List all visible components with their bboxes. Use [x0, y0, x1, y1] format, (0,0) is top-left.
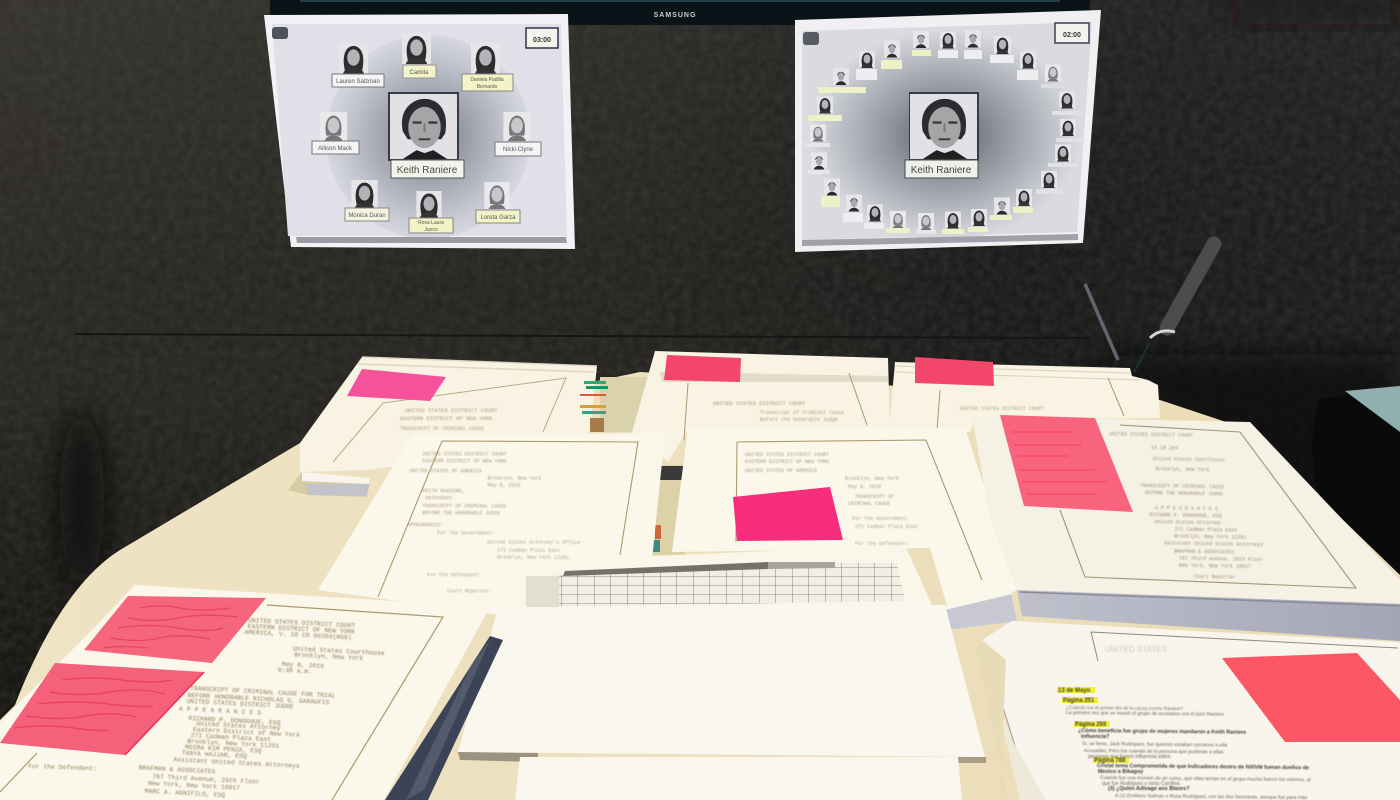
document: bottom-right notes in Spanish: Si, se tiene, Jack Rodríguez, fue quienes estaban cercanos a ella: [1082, 741, 1227, 749]
poster: outer ring diagram: [795, 10, 1101, 252]
document: middle-left transcript: TRANSCRIPT OF CRIMINAL CAUSE: [422, 503, 506, 510]
document: bottom-left transcript: EASTERN DISTRICT OF NEW YORK: [248, 623, 355, 636]
document: middle-left transcript: Court Reporter:: [447, 588, 492, 595]
colored index tabs: [580, 377, 650, 432]
document: bottom-right notes in Spanish: Cristal tema Comprometida de que Indicadores dentro de NXIVM fueran dueños de: [1097, 763, 1309, 771]
stack: top-center document: Transcript of Criminal Cause: [760, 410, 844, 416]
document: middle-center transcript: CRIMINAL CAUSE: [848, 501, 890, 507]
document: bottom-left transcript: MOIRA KIM PENZA, ESQ: [185, 744, 262, 755]
document: bottom-right notes in Spanish: ¿Cuándo fue el primer día de la causa contra Raniere?: [1066, 705, 1183, 712]
document: bottom-right notes in Spanish: Página 255: [1075, 722, 1107, 728]
document: bottom-right notes in Spanish: Acusadas, Pero fue cuando de la persona que pudieran a ellas: [1084, 748, 1224, 755]
portrait: Daniela: Bernardo: [477, 84, 497, 90]
document: middle-left transcript: BEFORE THE HONORABLE JUDGE: [422, 510, 500, 517]
document: right bound transcript: Court Reporter: [1194, 574, 1236, 581]
document: right bound transcript: United States Courthouse: [1153, 456, 1225, 463]
small gray book edge: [944, 590, 1017, 630]
document: middle-left transcript: Brooklyn, New York: [487, 476, 542, 482]
document: bottom-left transcript: UNITED STATES DISTRICT JUDGE: [186, 698, 294, 710]
document: right bound transcript: [972, 415, 1400, 641]
gray book spine: [1017, 590, 1400, 641]
document: right bound transcript: 767 Third Avenue, 26th Floor: [1179, 556, 1263, 563]
wall-mounted Samsung monitor: SAMSUNG: [654, 12, 696, 19]
document: bottom-right notes in Spanish: Página 251: [1063, 698, 1095, 704]
document: bottom-left transcript: Eastern District of New York: [193, 726, 301, 739]
document: bottom-right notes in Spanish: [982, 621, 1400, 800]
document: right bound transcript: TRANSCRIPT OF CRIMINAL CAUSE: [1140, 483, 1224, 490]
document: middle-left transcript: Brooklyn, New York 11201: [497, 555, 569, 561]
document: bottom-left transcript: RICHARD P. DONOGHUE, ESQ: [188, 715, 281, 727]
portrait: Lauren Salzman: Lauren Salzman: [336, 79, 380, 85]
binder: [385, 636, 503, 800]
portrait: Daniela: Daniela Padilla: [470, 77, 504, 83]
document: bottom-left transcript: United States Attorney: [196, 720, 281, 732]
cream round table: [0, 372, 1400, 800]
left page corner on table: [976, 640, 1008, 800]
sticky note: [1000, 415, 1133, 512]
back button: [272, 27, 288, 39]
sticky note: [347, 369, 446, 401]
ring of small portraits: [804, 30, 1082, 234]
document: bottom-right notes in Spanish: Influencia?: [1081, 734, 1109, 740]
clock box: 03:00: [533, 37, 551, 44]
portrait: Loreta Garza: [476, 182, 520, 223]
document: middle-center transcript: Brooklyn, New York: [845, 476, 899, 482]
document: bottom-right notes in Spanish: Mexico a Bikagoy: [1098, 769, 1143, 775]
portrait: Rosa Laura Junco: Junco: [424, 227, 438, 233]
stack: top-center document: UNITED STATES DISTRICT COURT: [713, 400, 806, 407]
document: middle-left transcript: United States Attorney's Office: [487, 540, 580, 546]
document: middle-left transcript: UNITED STATES OF AMERICA: [410, 468, 482, 475]
document: right bound transcript: BRAFMAN & ASSOCIATES: [1174, 549, 1234, 556]
document: bottom-right notes in Spanish: Página 788: [1094, 758, 1126, 764]
document: middle-center transcript: May 8, 2019: [848, 484, 881, 490]
document: bottom-left transcript: Brooklyn, New York: [294, 651, 364, 662]
document: right bound transcript: UNITED STATES DISTRICT COURT: [1109, 431, 1193, 439]
portrait: Monica Duran: [345, 180, 389, 221]
stack: top-left document: EASTERN DISTRICT OF NEW YORK: [400, 415, 493, 422]
document: bottom-left transcript: AMERICA, V. 18 CR 00204(NGG): [244, 629, 352, 641]
document: bottom-left transcript: BEFORE HONORABLE NICHOLAS G. GARAUFIS: [188, 692, 330, 706]
portrait: Nicki Clyne: Nicki Clyne: [503, 147, 534, 153]
sheet with attendance grid: [495, 545, 935, 612]
document: bottom-left transcript: New York, New York 10017: [148, 780, 240, 792]
clock box: 02:00: [1063, 32, 1081, 39]
document: middle-left transcript: APPEARANCES:: [407, 522, 443, 528]
document: bottom-left transcript: Assistant United States Attorneys: [173, 756, 300, 770]
document: middle-center transcript: 271 Cadman Plaza East: [855, 524, 918, 530]
stack: top-left document: [288, 357, 597, 497]
document: right bound transcript: RICHARD P. DONOGHUE, ESQ: [1150, 512, 1222, 519]
document: right bound transcript: United States Attorney: [1155, 519, 1221, 526]
document: middle-left transcript: Defendant.: [425, 495, 455, 501]
document: middle-center transcript: For the Defendant:: [855, 541, 909, 547]
document: middle-left transcript: 271 Cadman Plaza East: [497, 548, 560, 554]
document: right bound transcript: Brooklyn, New York 11201: [1174, 534, 1246, 541]
stack: top-left document: TRANSCRIPT OF CRIMINAL CAUSE: [400, 426, 484, 432]
document: bottom-right notes in Spanish: Cuando fue una reunión de un curso, que ellas tenían en el grupo mucha fueron los mismos, al: [1100, 775, 1311, 783]
portrait: Rosa Laura Junco: [409, 191, 453, 233]
document: middle-left transcript: For the Government:: [437, 530, 494, 537]
back button: [803, 32, 819, 45]
document: middle-center transcript: TRANSCRIPT OF: [855, 494, 894, 500]
document: bottom-right notes in Spanish: ¿Cómo beneficia fue grupo de mujeres mandaron a Keith Raniere: [1078, 728, 1246, 736]
document: bottom-left transcript: TRANSCRIPT OF CRIMINAL CAUSE FOR TRIAL: [190, 685, 336, 700]
portrait: Loreta Garza: Loreta Garza: [480, 215, 516, 221]
document: bottom-right notes in Spanish: personas que fueron influencia sobre.: [1088, 754, 1172, 760]
portrait: Nicki Clyne: [495, 112, 541, 156]
stack: top-center document: [632, 351, 890, 462]
document: bottom-left transcript: Brooklyn, New York 11201: [187, 738, 280, 750]
document: bottom-left transcript: MARC A. AGNIFILO, ESQ: [144, 788, 225, 799]
clock box: [526, 28, 558, 48]
document: bottom-left transcript: For the Defendant:: [28, 763, 97, 772]
stack: top-center document: Before the Honorable Judge: [760, 417, 838, 423]
document: bottom-left transcript: TANYA HAJJAR, ESQ: [182, 750, 247, 760]
document: bottom-right notes in Spanish: La primera vez que se reunió el grupo de acusados con el juez Raniere: [1066, 710, 1224, 718]
document: bottom-left transcript: United States Courthouse: [292, 645, 385, 657]
document: middle-center transcript: For the Government:: [852, 516, 909, 522]
document: bottom-left transcript: 9:30 a.m.: [277, 667, 312, 675]
document: middle-left transcript: UNITED STATES DISTRICT COURT: [423, 451, 507, 458]
document: middle-left transcript: For the Defendant:: [427, 572, 481, 579]
central portrait: Keith Raniere: [905, 92, 979, 178]
portrait: Allison Mack: Allison Mack: [318, 146, 353, 152]
portrait: Camila: [402, 33, 436, 78]
document: right bound transcript: New York, New York 10017: [1179, 563, 1251, 570]
document: middle-center transcript: [672, 428, 1018, 616]
document: middle-left transcript: [318, 433, 665, 615]
sticky note: [1222, 653, 1400, 742]
document: bottom-left transcript: BRAFMAN & ASSOCIATES: [139, 764, 216, 775]
sticky note: lower handwritten: [0, 663, 204, 755]
sticky note: upper handwritten: [84, 596, 266, 663]
document: middle-center transcript: UNITED STATES DISTRICT COURT: [745, 452, 829, 458]
poster: inner circle diagram: [264, 14, 575, 249]
document: middle-left transcript: May 8, 2019: [487, 483, 520, 489]
clock box: [1055, 23, 1089, 43]
document: bottom-left transcript: UNITED STATES DISTRICT COURT: [248, 617, 356, 630]
document: right bound transcript: BEFORE THE HONORABLE JUDGE: [1145, 490, 1223, 497]
document: right bound transcript: 18 CR 204: [1151, 445, 1178, 452]
stack: top-right document: [889, 357, 1160, 432]
document: middle-center transcript: UNITED STATES OF AMERICA: [745, 468, 817, 474]
dark equipment at right: [1312, 386, 1400, 580]
sticky note: [664, 355, 741, 382]
gap with table and tabs: [650, 465, 685, 555]
stack: top-right document: UNITED STATES DISTRICT COURT: [960, 406, 1044, 412]
document: bottom-left transcript: May 8, 2019: [282, 661, 324, 670]
document: bottom-left transcript: [0, 585, 490, 800]
document: bottom-right notes in Spanish: (3) ¿Quién Adivage aos Blazes?: [1108, 786, 1190, 792]
portrait: Rosa Laura Junco: Rosa Laura: [418, 220, 444, 226]
document: right bound transcript: Brooklyn, New York: [1155, 466, 1210, 473]
central portrait: Keith Raniere: Keith Raniere: [397, 165, 458, 176]
sticky note: [915, 357, 994, 386]
portrait: Monica Duran: Monica Duran: [348, 213, 386, 219]
wall-mounted Samsung monitor: [270, 0, 1090, 25]
document: middle-center transcript: EASTERN DISTRICT OF NEW YORK: [745, 459, 829, 465]
document: right bound transcript: 271 Cadman Plaza East: [1174, 527, 1238, 534]
document: bottom-left transcript: 271 Cadman Plaza East: [190, 732, 271, 743]
document: bottom-left transcript: 767 Third Avenue, 26th Floor: [152, 773, 260, 786]
portrait: Lauren Salzman: [332, 43, 384, 87]
sticky note: [733, 487, 843, 541]
blank white sheet: [458, 605, 986, 763]
portrait: Camila: Camila: [410, 70, 429, 76]
document: bottom-right notes in Spanish: 13 de Mayo: [1058, 688, 1091, 694]
central portrait: Keith Raniere: Keith Raniere: [911, 165, 972, 176]
document: bottom-right notes in Spanish: que fue Rodríguez y otras Carolina.: [1102, 781, 1181, 787]
document: middle-left transcript: EASTERN DISTRICT OF NEW YORK: [423, 458, 507, 465]
document: right bound transcript: A P P E A R A N C E S: [1155, 505, 1218, 512]
document: middle-left transcript: KEITH RANIERE,: [422, 488, 464, 494]
stack: top-left document: UNITED STATES DISTRICT COURT: [405, 407, 498, 414]
yellow highlights: [1057, 687, 1129, 763]
portrait: Allison Mack: [312, 112, 359, 154]
chair arm: [1085, 244, 1214, 372]
bottom blank sheet: [515, 757, 962, 800]
document: bottom-right notes in Spanish: UNITED STATES: [1105, 645, 1167, 654]
document: right bound transcript: Assistant United States Attorneys: [1164, 540, 1263, 548]
central portrait: Keith Raniere: [388, 92, 464, 178]
portrait: Daniela: [462, 43, 513, 91]
edge of thin booklet: [288, 472, 370, 497]
document: bottom-left transcript: APPEARANCES: [179, 705, 265, 717]
